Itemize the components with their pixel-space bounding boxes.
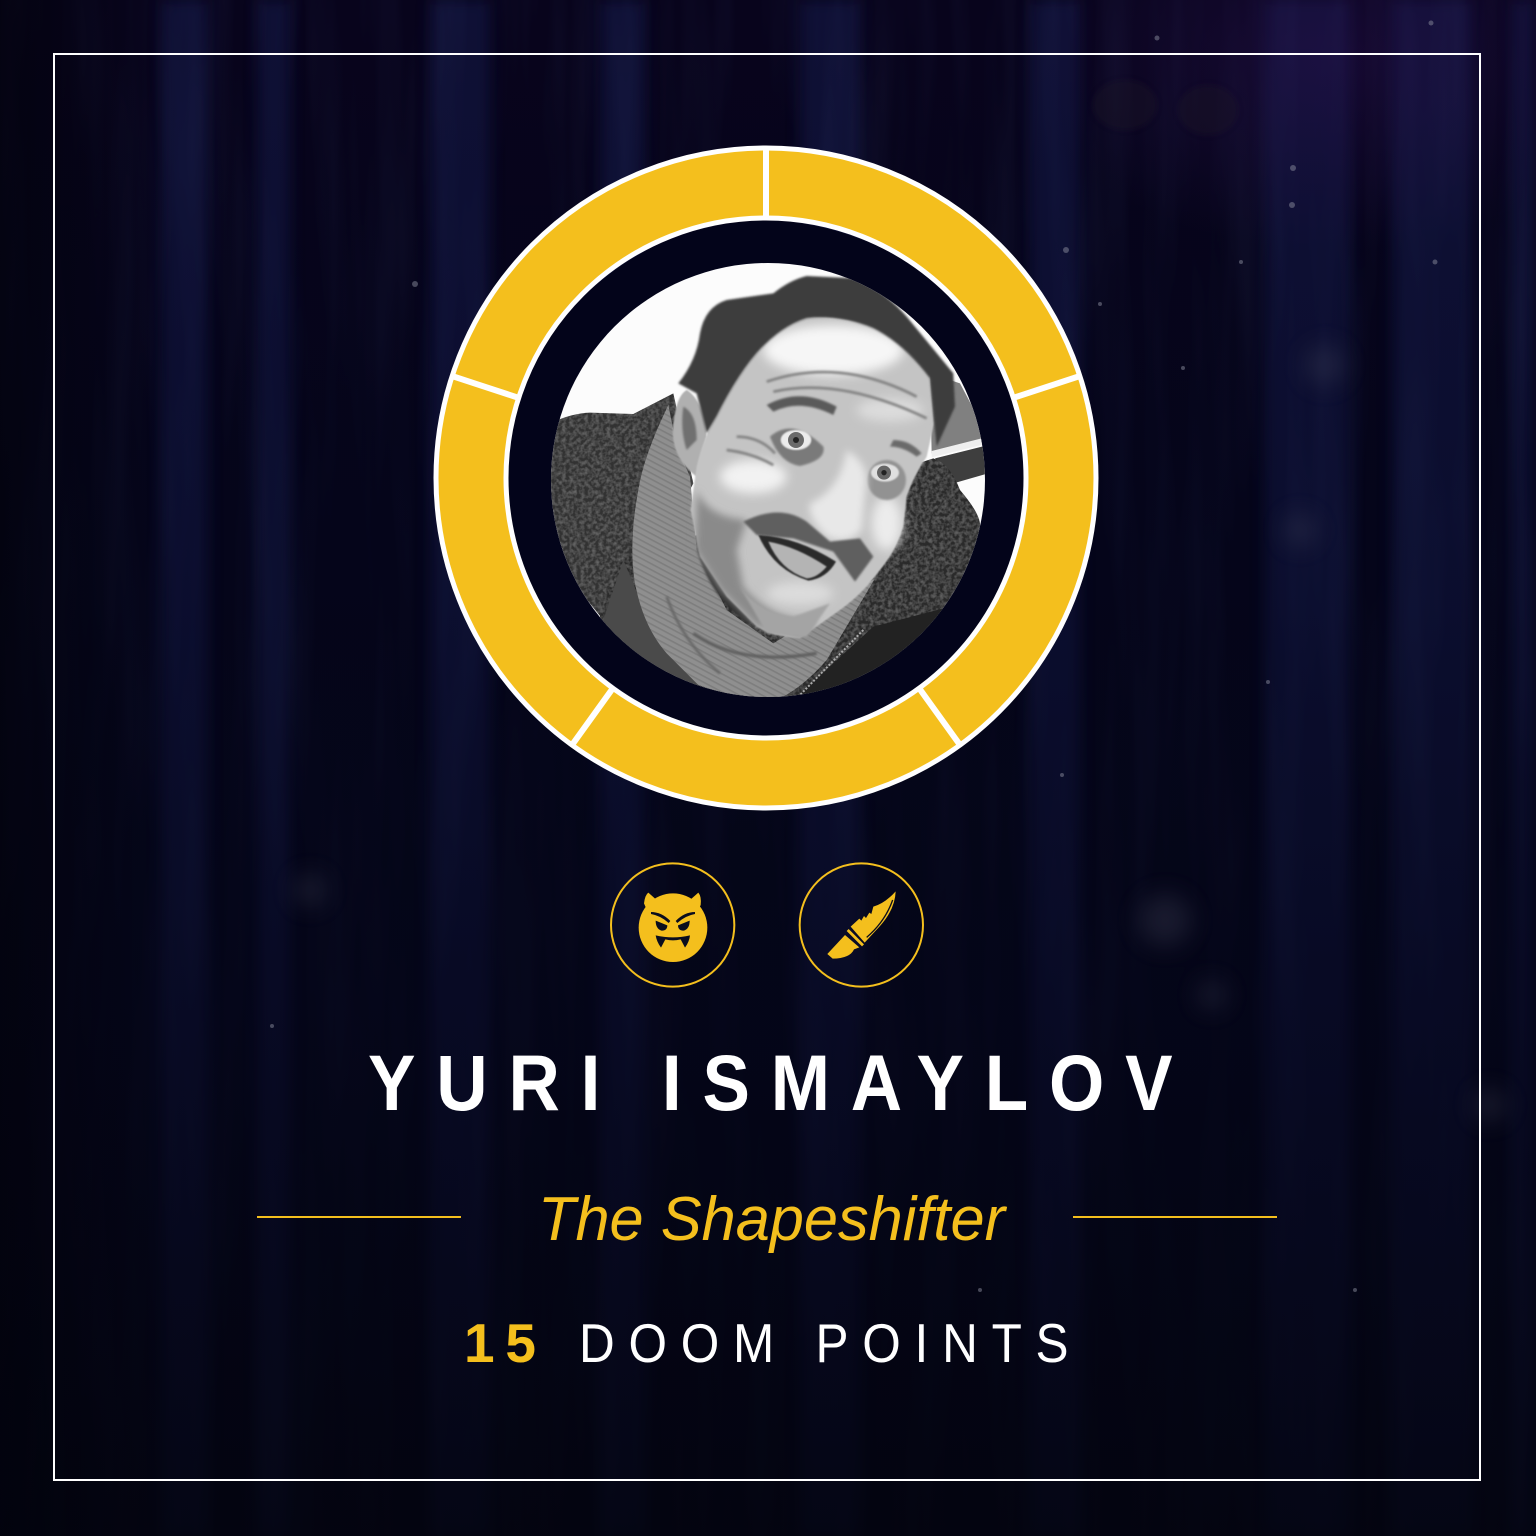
knife guard	[847, 929, 864, 946]
icon badge: devil face	[611, 863, 734, 987]
name heading: YURI ISMAYLOV	[368, 1039, 1173, 1127]
forehead highlight	[763, 325, 903, 375]
hair	[678, 276, 955, 447]
bottom coat zip	[800, 630, 863, 695]
ear	[673, 390, 707, 477]
eyes	[781, 430, 811, 450]
eye sockets	[770, 429, 824, 466]
knife blade	[851, 891, 896, 943]
moustache	[743, 512, 873, 582]
devil head	[639, 893, 707, 962]
coat	[547, 393, 693, 620]
doom points score: 15	[464, 1312, 536, 1374]
devil brows and eyes	[651, 912, 695, 948]
doom points score: DOOM POINTS	[579, 1314, 1069, 1375]
devil horns	[644, 893, 701, 913]
stubble and jaw	[695, 490, 817, 638]
inner dark disc	[509, 221, 1023, 735]
mouth	[758, 535, 836, 581]
scarf	[632, 405, 875, 698]
subtitle with side rules: The Shapeshifter	[538, 1185, 1007, 1254]
forehead wrinkles	[727, 372, 927, 465]
icon badge: knife	[800, 863, 923, 987]
nose	[810, 450, 866, 540]
face	[691, 318, 934, 638]
car behind the man	[930, 377, 981, 454]
knife handle	[827, 935, 859, 959]
donut ring: five yellow segments	[436, 148, 1096, 808]
brows	[767, 396, 837, 415]
portrait photo	[551, 263, 985, 697]
